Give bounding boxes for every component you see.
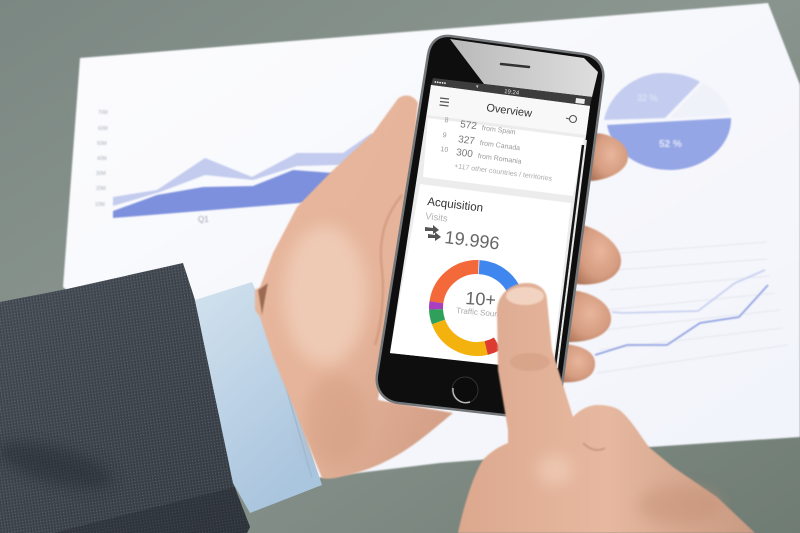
- other countries note: +117 other countries / territories: [454, 163, 553, 183]
- status bar time: 19:24: [504, 89, 520, 97]
- area chart axis labels: 50M: [97, 141, 107, 147]
- area chart axis labels: [95, 110, 108, 208]
- sleeve hem: [53, 487, 250, 533]
- acquisition heading: Acquisition: [427, 195, 484, 215]
- home button: [452, 377, 478, 403]
- status bar wifi: ▾: [476, 84, 479, 90]
- area chart axis labels: 40M: [97, 156, 107, 162]
- thumb crease: [375, 195, 402, 345]
- row 9: 9: [442, 132, 447, 140]
- fingertip highlight: [506, 287, 544, 305]
- purple segment: [429, 302, 443, 309]
- visits label: Visits: [425, 211, 449, 225]
- visits value: 19.996: [444, 227, 501, 253]
- row 8: 572: [459, 119, 478, 132]
- row 8: 8: [444, 117, 449, 125]
- upper line series: [612, 270, 765, 313]
- yellow segment: [438, 322, 486, 349]
- status bar: [431, 78, 592, 106]
- phone body: [377, 36, 603, 418]
- area chart axis labels: 30M: [96, 171, 106, 177]
- lower palm shade: [305, 375, 365, 465]
- hand: palm and thumb behind the phone: [255, 96, 628, 479]
- palm highlight: [283, 225, 367, 365]
- pie chart: [604, 73, 731, 170]
- top slice: [604, 73, 700, 120]
- area chart axis labels: 60M: [98, 126, 108, 132]
- lower line series: [595, 285, 768, 355]
- light area series: [113, 133, 372, 206]
- area chart axis labels: 70M: [98, 110, 108, 116]
- quarter label: Q1: [198, 215, 209, 224]
- area chart axis labels: 20M: [96, 186, 106, 192]
- panel: countries card: [423, 117, 584, 196]
- screen edge reflection stripes: [555, 140, 586, 368]
- speaker slot: [501, 64, 529, 67]
- blue segment: [479, 267, 514, 291]
- orange segment: [436, 267, 478, 302]
- row 9: [442, 132, 521, 153]
- app header: [427, 85, 590, 135]
- area chart: left report graph: [95, 110, 372, 224]
- panel: phone screen: [390, 85, 590, 371]
- header title: Overview: [486, 102, 533, 120]
- row 10: 10: [440, 146, 449, 154]
- row 8: from Spain: [481, 125, 516, 136]
- knuckle highlight: [537, 454, 573, 486]
- suit sleeve: [0, 263, 250, 533]
- shirt cuff: [195, 282, 322, 513]
- glass reflection: [450, 39, 598, 97]
- row 10: [440, 145, 522, 167]
- pointing hand in the foreground: [458, 283, 755, 533]
- icon: menu: [440, 98, 449, 106]
- cuff seam: [264, 310, 312, 478]
- line chart: right report graph: [595, 242, 788, 373]
- area chart axis labels: 10M: [95, 202, 105, 208]
- hand shadow: [638, 485, 722, 525]
- status bar battery: [575, 98, 585, 104]
- thumb crease: [583, 443, 605, 450]
- icon: refresh: [566, 116, 576, 122]
- smartphone: [377, 36, 603, 418]
- sleeve fold shadow: [0, 432, 118, 498]
- dark area series: [113, 165, 372, 218]
- icon: traffic arrows: [425, 225, 441, 241]
- finger three: [565, 290, 611, 342]
- green segment: [436, 309, 438, 322]
- row 8: [444, 117, 516, 137]
- row 9: 327: [457, 134, 476, 147]
- status bar signal dots: ●●●●●: [434, 79, 447, 86]
- finger joint: [510, 353, 550, 371]
- finger four: [558, 344, 595, 382]
- row 10: from Romania: [477, 153, 522, 166]
- finger two: [575, 224, 621, 285]
- panel: acquisition card: [390, 184, 571, 370]
- pie labels: 32 %: [637, 93, 658, 103]
- finger one: [590, 133, 628, 181]
- pie chart: 52 %: [659, 139, 682, 150]
- row 10: 300: [455, 147, 474, 160]
- donut value: 10+: [465, 288, 497, 310]
- donut chart: [436, 267, 514, 349]
- bottom slice: [607, 118, 731, 170]
- row 9: from Canada: [479, 140, 521, 152]
- red segment: [486, 344, 498, 348]
- faint slice: [670, 83, 730, 118]
- donut caption: Traffic Source: [456, 306, 506, 319]
- wrist shadow: [258, 283, 268, 315]
